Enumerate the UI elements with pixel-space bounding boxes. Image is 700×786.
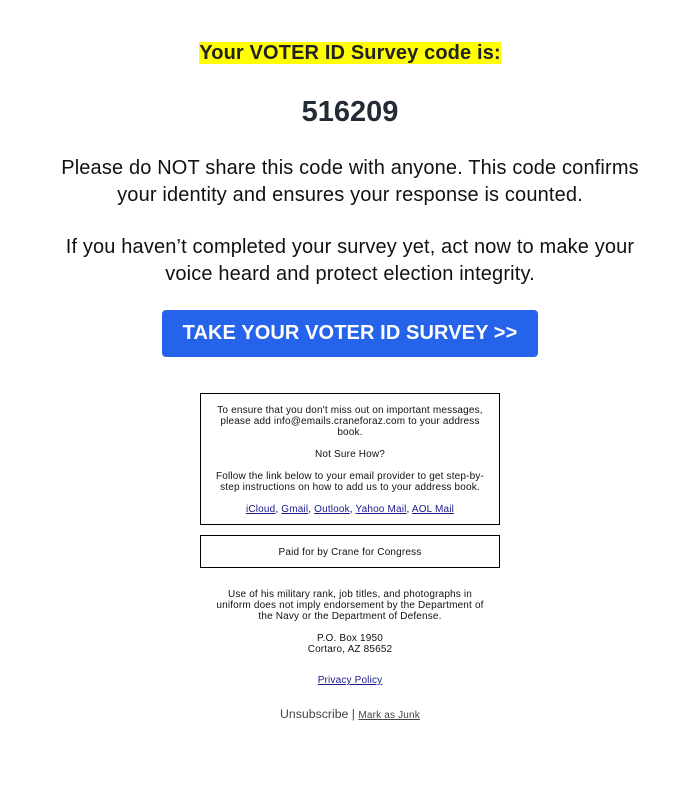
panel: paid for by: Paid for by Crane for Congress bbox=[279, 547, 421, 558]
button: take survey: TAKE YOUR VOTER ID SURVEY >> bbox=[183, 322, 517, 344]
email provider links: iCloud, Gmail, Outlook, Yahoo Mail, AOL Mail bbox=[246, 504, 454, 515]
link: privacy policy: Privacy Policy bbox=[318, 675, 382, 686]
text block: military disclaimer: the Navy or the Department of Defense. bbox=[258, 611, 442, 622]
text block: mailing address: Cortaro, AZ 85652 bbox=[308, 644, 392, 655]
text block: mailing address bbox=[308, 633, 392, 655]
panel: address book instructions: Not Sure How? bbox=[315, 449, 385, 460]
panel: address book instructions bbox=[200, 393, 500, 525]
panel: address book instructions: step instructions on how to add us to your address book. bbox=[220, 482, 480, 493]
text block: call to action: voice heard and protect election integrity. bbox=[165, 263, 535, 285]
text block: do not share notice: your identity and ensures your response is counted. bbox=[117, 184, 583, 206]
text block: call to action: If you haven’t completed your survey yet, act now to make your bbox=[66, 236, 634, 258]
panel: address book instructions: please add info@emails.craneforaz.com to your address bbox=[220, 416, 480, 427]
footer: unsubscribe and junk links: Unsubscribe | Mark as Junk bbox=[280, 707, 420, 721]
panel: paid for by bbox=[200, 535, 500, 568]
button: take survey bbox=[162, 310, 538, 357]
text block: do not share notice bbox=[61, 157, 639, 206]
panel: address book instructions: To ensure that you don't miss out on important messages, bbox=[217, 405, 483, 416]
text block: do not share notice: Please do NOT share this code with anyone. This code confirms bbox=[61, 157, 639, 179]
text block: mailing address: P.O. Box 1950 bbox=[317, 633, 383, 644]
text block: military disclaimer bbox=[216, 589, 484, 622]
heading: survey code label: Your VOTER ID Survey code is: bbox=[199, 42, 501, 64]
text block: military disclaimer: uniform does not imply endorsement by the Department of bbox=[216, 600, 484, 611]
survey code number: 516209 bbox=[302, 96, 398, 128]
panel: address book instructions: book. bbox=[337, 427, 363, 438]
text block: call to action bbox=[66, 236, 634, 285]
text block: military disclaimer: Use of his military rank, job titles, and photographs in bbox=[228, 589, 472, 600]
panel: address book instructions: Follow the link below to your email provider to get step-by- bbox=[216, 471, 484, 482]
